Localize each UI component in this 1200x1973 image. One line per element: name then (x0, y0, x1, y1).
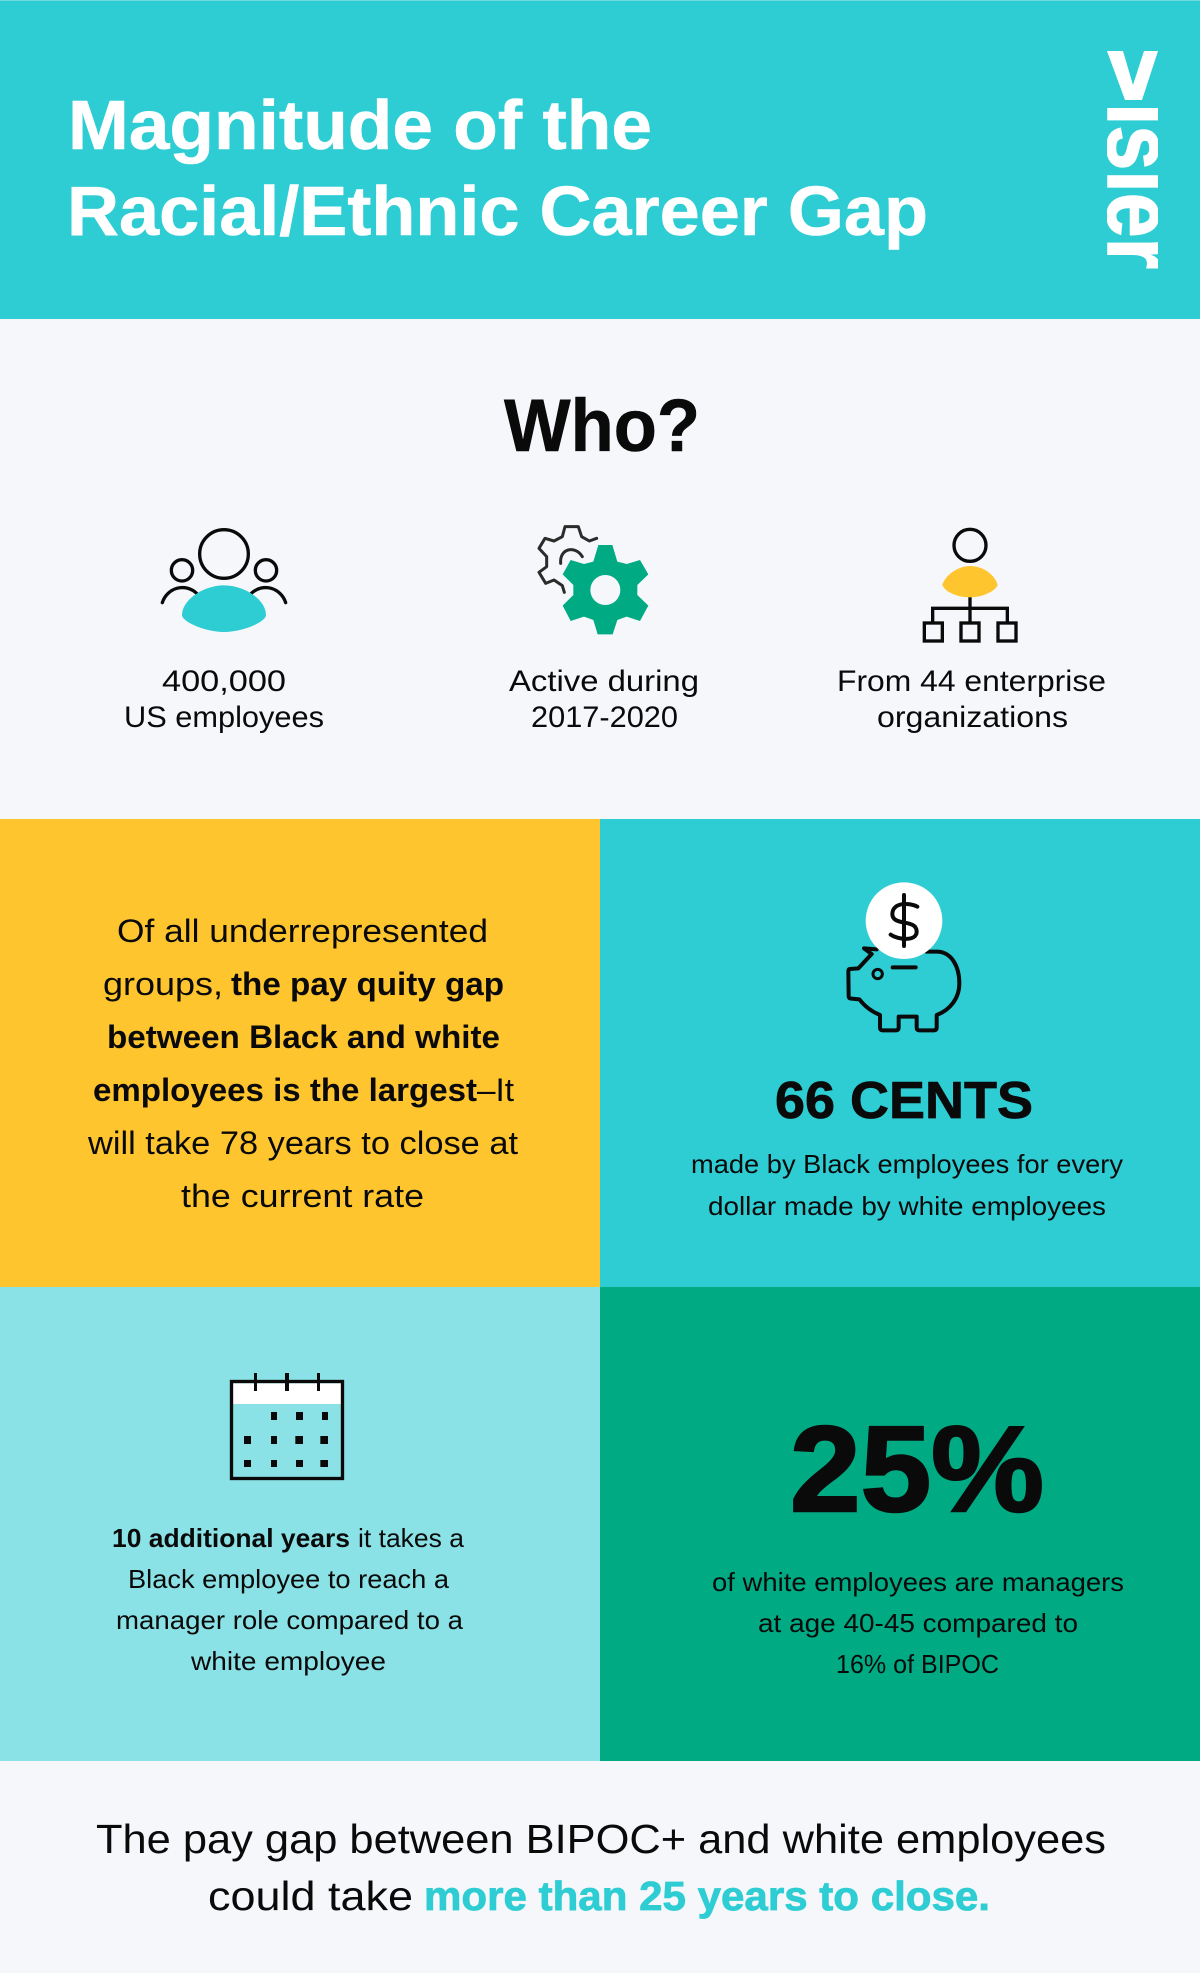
description: dollar made by white employees (708, 1191, 1106, 1221)
icon: group of people (162, 530, 286, 632)
stat heading: 66 CENTS (775, 1072, 1033, 1130)
closing statement: The pay gap between BIPOC+ and white employees (96, 1816, 1106, 1862)
closing statement (96, 1816, 1106, 1919)
label: US employees (124, 701, 324, 734)
text block (112, 1523, 465, 1676)
text block: Black employee to reach a (128, 1564, 450, 1594)
label: 2017-2020 (531, 701, 678, 734)
text block: the current rate (181, 1178, 424, 1214)
panel: 66 cents (600, 819, 1200, 1287)
description (691, 1149, 1123, 1221)
logo: visier (1107, 51, 1158, 268)
text block (87, 913, 518, 1214)
label: From 44 enterprise (837, 665, 1106, 698)
title: Racial/Ethnic Career Gap (67, 172, 928, 250)
icon: org chart (924, 529, 1016, 641)
text block: employees is the largest (93, 1072, 477, 1108)
label: 400,000 (162, 665, 286, 698)
panel: pay equity gap (0, 819, 600, 1287)
text block: between Black and white (107, 1019, 500, 1055)
description: at age 40-45 compared to (758, 1608, 1078, 1638)
closing statement: more than 25 years to close. (424, 1873, 990, 1919)
label: organizations (877, 701, 1068, 734)
label: Active during (509, 665, 699, 698)
text block: 10 additional years (112, 1523, 350, 1553)
text block: groups, (103, 966, 223, 1002)
label (509, 665, 699, 734)
logo: visier: isier (1088, 103, 1193, 269)
closing statement: could take (208, 1873, 413, 1919)
label (837, 665, 1106, 734)
title: Magnitude of the (68, 86, 652, 164)
label (124, 665, 324, 734)
stat: 400,000 US employees (124, 530, 324, 734)
stat: 44 enterprise organizations (837, 529, 1106, 734)
icon: gears (539, 527, 648, 634)
description: 16% of BIPOC (836, 1649, 999, 1679)
big number: 25% (790, 1401, 1044, 1537)
text block: –It (477, 1072, 514, 1108)
header banner (0, 0, 1200, 319)
description: of white employees are managers (712, 1567, 1124, 1597)
panel: 10 additional years (0, 1287, 600, 1761)
heading: Who?: Who? (504, 384, 700, 467)
icon: piggy bank and coin (848, 882, 959, 1030)
text block: will take 78 years to close at (87, 1125, 518, 1161)
panel: 25 percent (600, 1287, 1200, 1761)
text block: manager role compared to a (116, 1605, 464, 1635)
text block: it takes a (358, 1523, 465, 1553)
icon: calendar (231, 1373, 342, 1478)
description (712, 1567, 1124, 1679)
description: made by Black employees for every (691, 1149, 1123, 1179)
text block: Of all underrepresented (117, 913, 488, 949)
section: who (124, 384, 1106, 734)
text block: the pay quity gap (231, 966, 504, 1002)
title (67, 86, 928, 250)
text block: white employee (190, 1646, 386, 1676)
stat: active during 2017-2020 (509, 527, 699, 734)
